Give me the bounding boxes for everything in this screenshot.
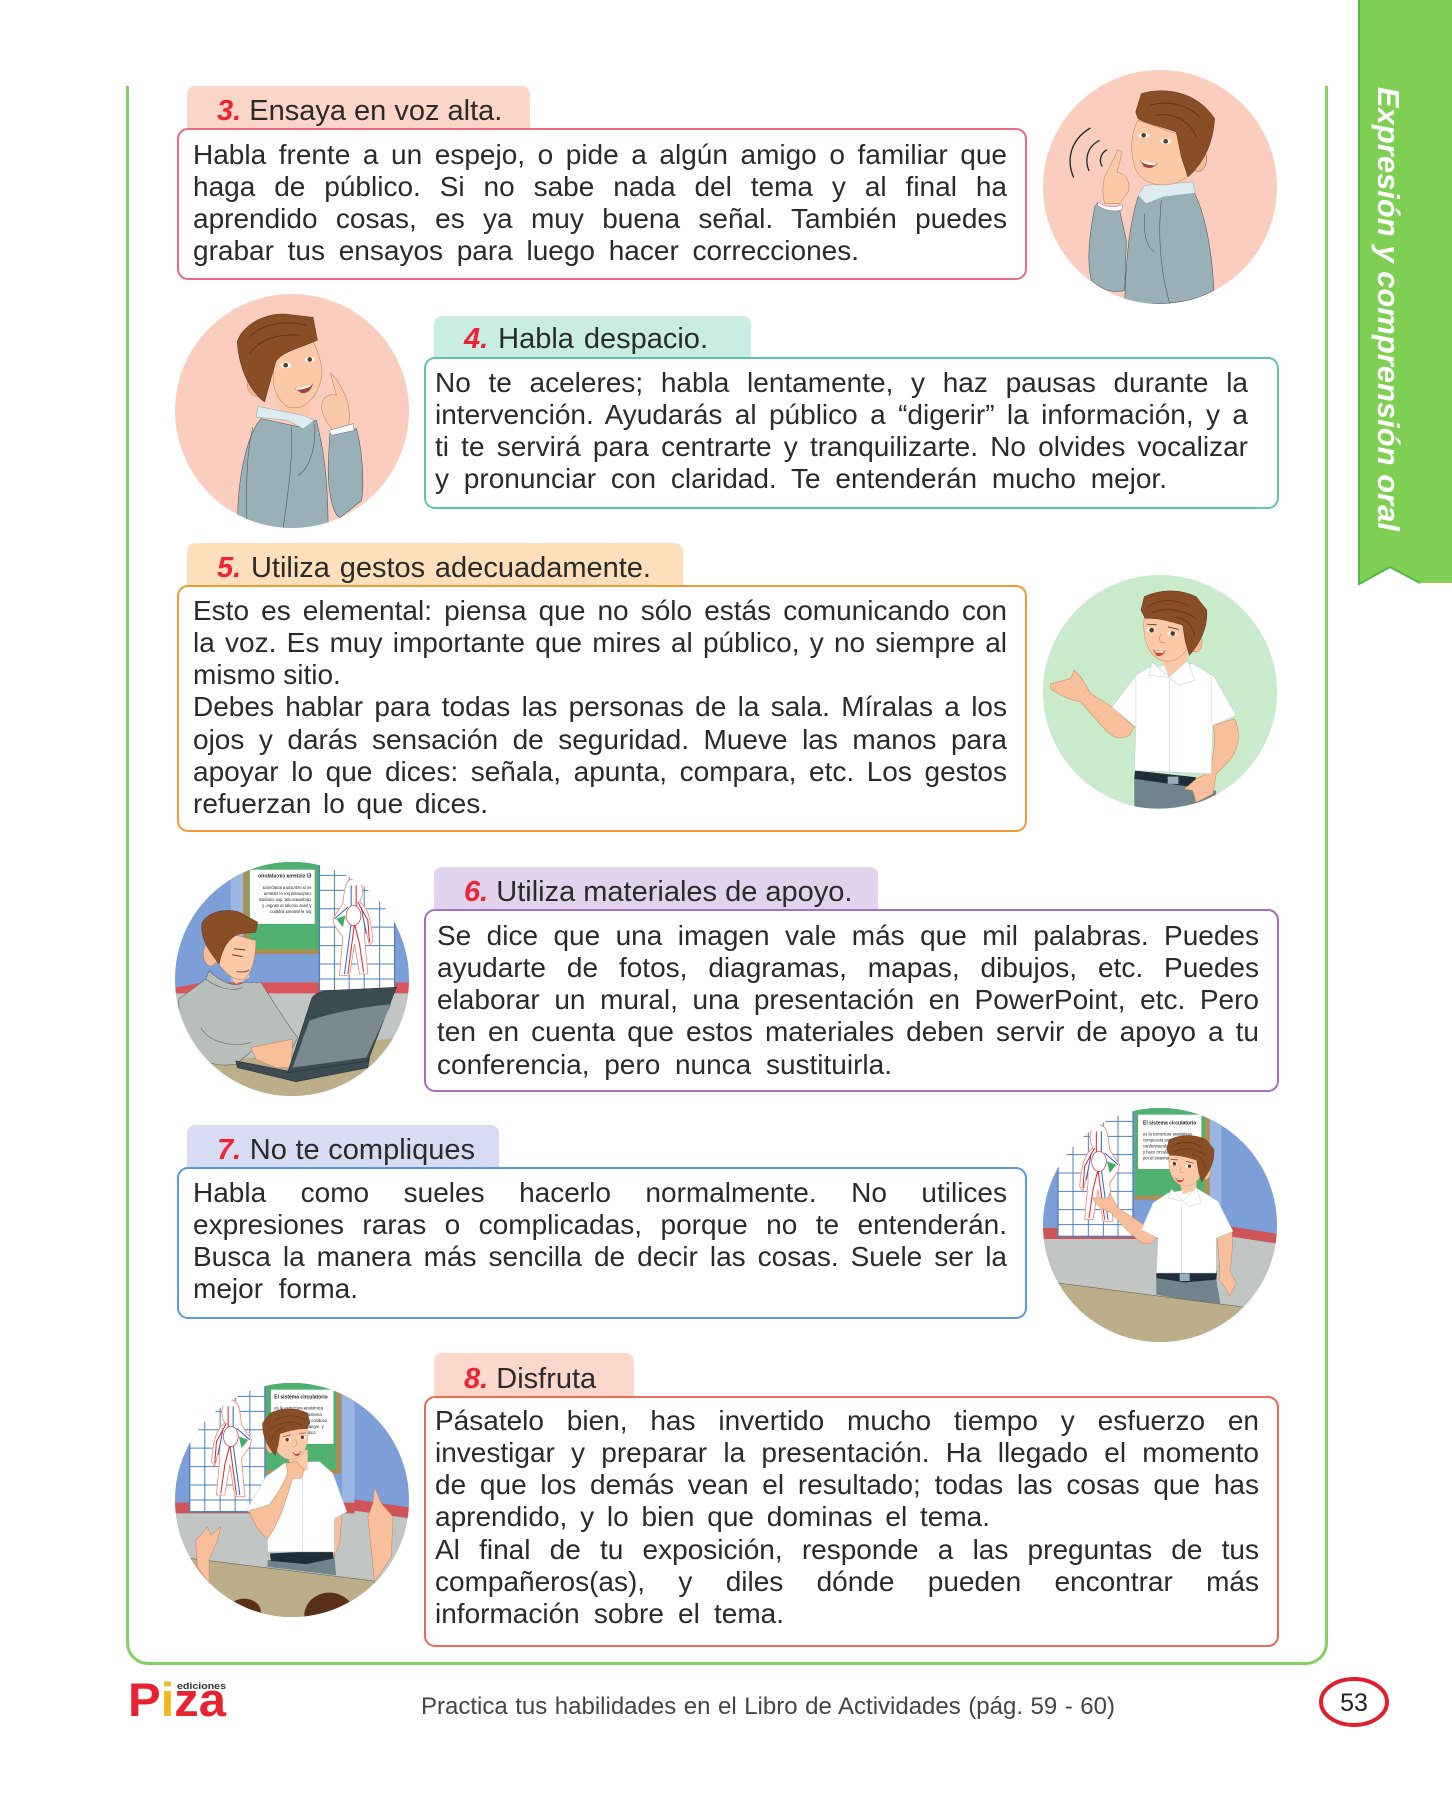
body text: step 8: compañeros(as), y diles dónde pueden encontrar más <box>435 1566 1259 1597</box>
body text: step 5 <box>193 595 1007 819</box>
heading: step 8 title: 8. Disfruta <box>464 1363 596 1395</box>
body text: step 6: elaborar un mural, una presentación en PowerPoint, etc. Pero <box>437 984 1259 1015</box>
body text: step 4: ti te servirá para centrarte y tranquilizarte. No olvides vocalizar <box>435 431 1248 462</box>
body text: step 5: mismo sitio. <box>193 659 341 690</box>
heading: step 6 tab <box>434 867 878 911</box>
illustration: boy speaking with sound waves <box>1043 70 1277 304</box>
body text: step 3: aprendido cosas, es ya muy buena señal. También puedes <box>193 203 1007 234</box>
body text: step 5: refuerzan lo que dices. <box>193 788 488 819</box>
body text: step 7: Busca la manera más sencilla de decir las cosas. Suele ser la <box>193 1241 1007 1272</box>
body text: step 5: Debes hablar para todas las personas de la sala. Míralas a los <box>193 691 1007 722</box>
heading: step 7 title: 7. No te compliques <box>217 1134 475 1166</box>
panel: step 7 <box>177 1125 1027 1319</box>
heading: step 4 title: 4. Habla despacio. <box>464 323 708 355</box>
body text: step 3 <box>193 139 1007 266</box>
text block: step 7 <box>177 1167 1027 1319</box>
body text: step 5: ojos y darás sensación de seguridad. Mueve las manos para <box>193 724 1007 754</box>
body text: step 7: mejor forma. <box>193 1273 358 1304</box>
body text: step 6: ten en cuenta que estos materiales deben servir de apoyo a tu <box>437 1016 1259 1047</box>
illustration: boy at laptop with circulatory chart <box>175 862 409 1096</box>
heading: step 5 title: 5. Utiliza gestos adecuadamente. <box>217 552 651 584</box>
text block: step 8 <box>424 1396 1279 1647</box>
illustration: boy speaking slowly, finger raised <box>175 294 409 528</box>
heading: step 7 tab <box>187 1125 499 1169</box>
body text: step 3: haga de público. Si no sabe nada del tema y al final ha <box>193 171 1007 202</box>
green page frame <box>126 86 1328 1665</box>
panel: step 8 <box>424 1353 1279 1647</box>
body text: step 4 <box>435 367 1248 494</box>
heading: step 4 tab <box>434 316 751 360</box>
illustration: boy pointing at circulatory chart <box>1043 1108 1277 1342</box>
body text: step 5: la voz. Es muy importante que mires al público, y no siempre al <box>193 627 1007 658</box>
body text: step 8: Al final de tu exposición, responde a las preguntas de tus <box>435 1534 1259 1564</box>
body text: step 6: ayudarte de fotos, diagramas, mapas, dibujos, etc. Puedes <box>437 952 1259 983</box>
panel: step 3 <box>177 86 1027 280</box>
body text: step 7 <box>193 1177 1007 1304</box>
body text: step 4: y pronunciar con claridad. Te entenderán mucho mejor. <box>435 463 1167 494</box>
illustration: boy answering classmates' raised hands <box>175 1383 409 1617</box>
body text: step 3: grabar tus ensayos para luego hacer correcciones. <box>193 235 859 266</box>
side tab: section title <box>1358 0 1452 586</box>
heading: step 5 tab <box>187 543 683 587</box>
body text: step 8: Pásatelo bien, has invertido mucho tiempo y esfuerzo en <box>435 1405 1259 1436</box>
body text: step 6: conferencia, pero nunca sustituirla. <box>437 1048 892 1080</box>
body text: step 8 <box>435 1405 1259 1629</box>
body text: step 8: información sobre el tema. <box>435 1598 784 1629</box>
body text: step 4: No te aceleres; habla lentamente, y haz pausas durante la <box>435 367 1248 398</box>
body text: step 6 <box>437 920 1259 1080</box>
heading: step 3 title: 3. Ensaya en voz alta. <box>217 95 502 127</box>
panel: step 6 <box>424 867 1279 1092</box>
text block: step 6 <box>424 909 1279 1092</box>
heading: step 8 tab <box>434 1353 634 1397</box>
body text: step 5: apoyar lo que dices: señala, apunta, compara, etc. Los gestos <box>193 756 1007 787</box>
body text: step 7: Habla como sueles hacerlo normalmente. No utilices <box>193 1177 1007 1208</box>
page number <box>1319 1677 1389 1727</box>
body text: step 8: aprendido, y lo bien que dominas el tema. <box>435 1501 990 1532</box>
illustration: boy gesturing with open hand <box>1043 575 1277 809</box>
heading: step 3 tab <box>187 86 530 130</box>
text block: step 3 <box>177 128 1027 280</box>
body text: step 4: intervención. Ayudarás al público a “digerir” la información, y a <box>435 399 1248 430</box>
side tab: section title: Expresión y comprensión oral <box>1371 87 1406 532</box>
body text: step 8: de que los demás vean el resultado; todas las cosas que has <box>435 1469 1259 1500</box>
panel: step 4 <box>424 316 1279 509</box>
page number: 53 <box>1340 1689 1368 1717</box>
body text: step 5: Esto es elemental: piensa que no sólo estás comunicando con <box>193 595 1007 626</box>
text block: step 5 <box>177 585 1027 832</box>
body text: step 3: Habla frente a un espejo, o pide a algún amigo o familiar que <box>193 139 1007 170</box>
body text: step 8: investigar y preparar la presentación. Ha llegado el momento <box>435 1437 1259 1468</box>
footer note: Practica tus habilidades en el Libro de Actividades (pág. 59 - 60) <box>421 1693 1115 1720</box>
body text: step 6: Se dice que una imagen vale más que mil palabras. Puedes <box>437 920 1259 951</box>
text block: step 4 <box>424 357 1279 509</box>
logo: Piza ediciones: ediciones <box>177 1681 226 1691</box>
heading: step 6 title: 6. Utiliza materiales de apoyo. <box>464 876 852 908</box>
panel: step 5 <box>177 543 1027 832</box>
body text: step 7: expresiones raras o complicadas, porque no te entenderán. <box>193 1209 1007 1240</box>
